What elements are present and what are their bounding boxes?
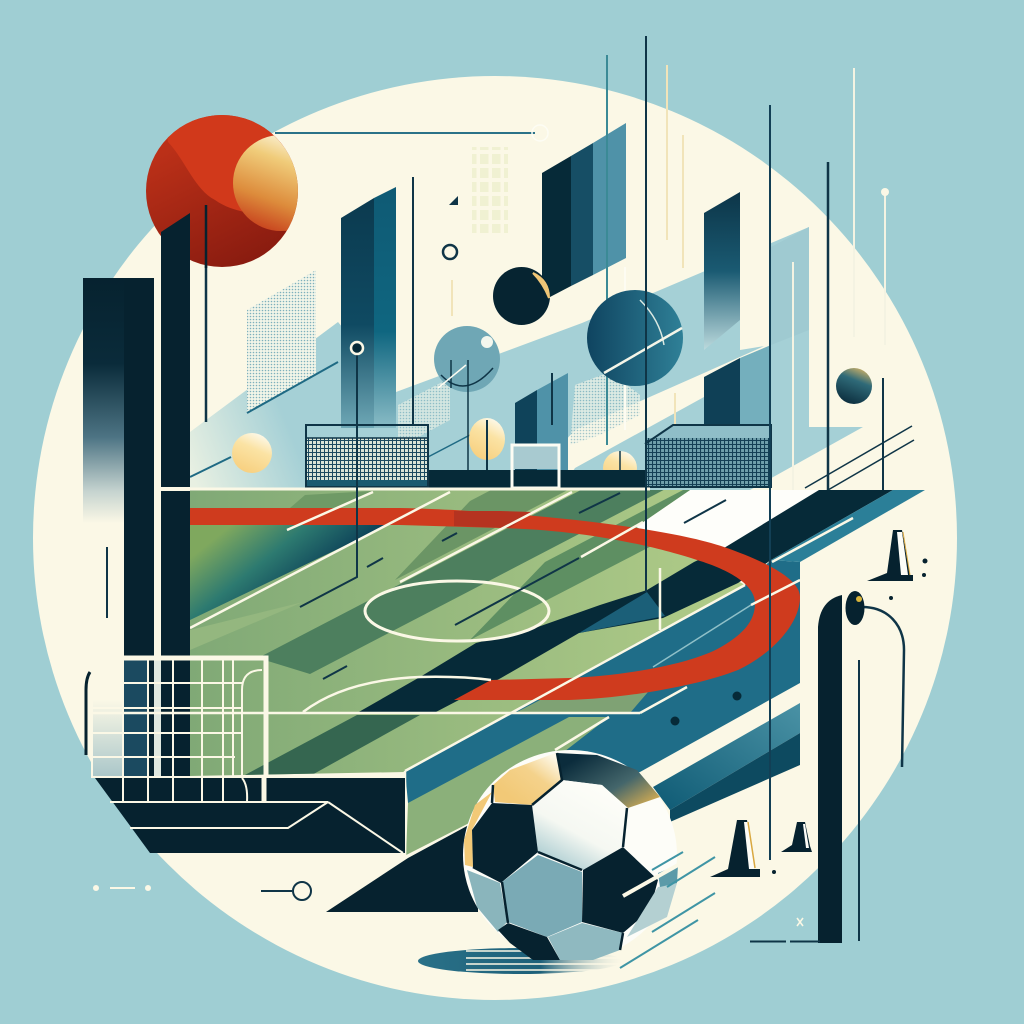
dark left wedge [190, 525, 388, 620]
cone top right [867, 530, 913, 581]
small dark ball right [836, 368, 872, 404]
tower left [341, 187, 396, 428]
background goals [306, 425, 771, 489]
pitch markings [160, 489, 853, 857]
yellow ball centre [469, 418, 505, 490]
tower centre [542, 123, 626, 297]
yellow ball left [232, 433, 272, 473]
foreground shadow wedge [326, 822, 478, 912]
navy diagonal band [357, 490, 893, 713]
panel seams [473, 753, 627, 950]
lamp post [750, 591, 904, 943]
near goal [86, 658, 268, 802]
column one [83, 278, 125, 523]
left lower blue panel [467, 870, 507, 932]
red ball [146, 115, 298, 267]
bottom blue panel [548, 923, 623, 960]
cream diagonal stripe [520, 343, 771, 490]
tower small [515, 373, 568, 470]
gold panels [493, 752, 562, 805]
penalty arc [303, 677, 491, 712]
tower right [704, 192, 809, 430]
thin dark field lines [300, 36, 828, 860]
dark ball [493, 267, 550, 325]
goal centre [512, 445, 559, 488]
thin vertical and long lines [107, 55, 914, 618]
right lower blue panel [627, 883, 677, 937]
background buildings [190, 123, 863, 490]
green wedge [515, 692, 648, 713]
ball shadow [418, 948, 622, 974]
highlight [233, 136, 298, 231]
dots [732, 692, 742, 700]
red running track [190, 508, 800, 700]
speed lines [620, 852, 715, 968]
centre white panel [532, 780, 627, 870]
small ring [443, 245, 457, 259]
small markers bottom left [93, 885, 151, 891]
ring on post [351, 342, 363, 354]
pitch [190, 490, 744, 776]
goal left [306, 425, 428, 487]
white terrace [636, 490, 819, 549]
cone small [781, 822, 812, 852]
floating balls [232, 267, 872, 490]
ring marker [261, 882, 311, 900]
pin top [881, 188, 889, 196]
goal right [645, 425, 771, 487]
window grid [472, 147, 508, 233]
bottom dark panel [498, 923, 560, 960]
pitch base [190, 490, 745, 776]
diagonal pale band [190, 227, 863, 490]
large teal ball [587, 290, 683, 386]
dark bar [428, 470, 650, 489]
left dark panel [472, 803, 538, 882]
lower stripe [653, 703, 800, 822]
top dark panel [557, 753, 660, 808]
dotted block [247, 270, 316, 413]
dotted band patch [570, 372, 640, 445]
teal patch [579, 592, 665, 633]
small triangle [449, 196, 458, 205]
column two [161, 213, 190, 777]
cone centre [710, 820, 760, 877]
teal bank [405, 560, 800, 827]
ring at top line [532, 125, 548, 141]
upper teal strip [771, 490, 925, 562]
cream corner [190, 491, 237, 507]
soccer ball [463, 750, 678, 960]
blue ball [434, 326, 500, 470]
near goal base [92, 777, 405, 853]
centre blue panel [502, 855, 582, 937]
stripes [290, 491, 372, 508]
right dark panel [582, 847, 658, 933]
yellow ball right [603, 451, 637, 490]
cones [710, 530, 928, 877]
centre circle [365, 581, 549, 641]
green wall panel [406, 717, 609, 857]
left dark columns [83, 115, 298, 656]
